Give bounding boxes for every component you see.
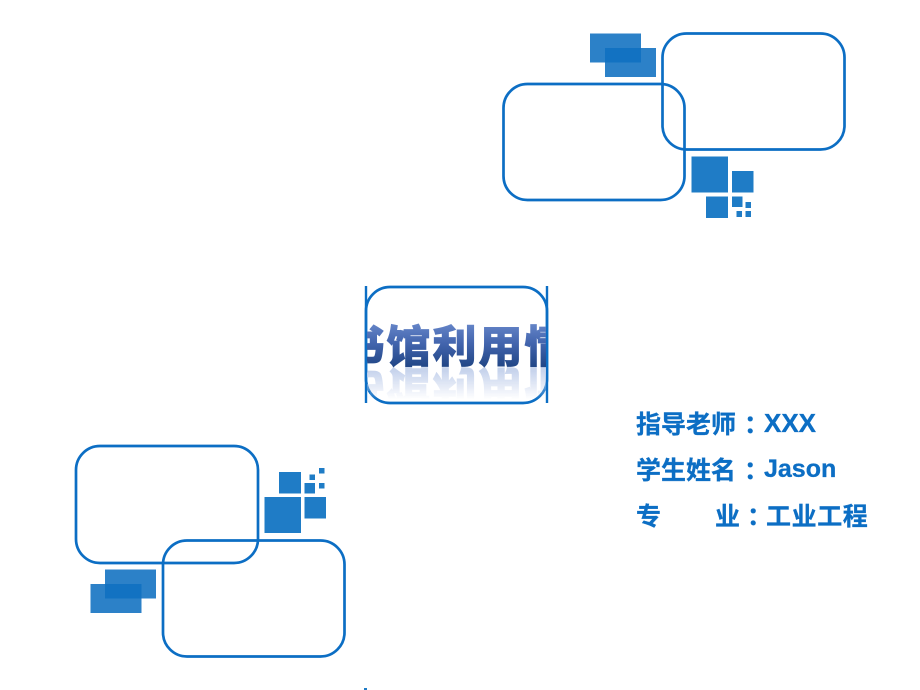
- info: major: 专: [636, 497, 661, 533]
- top-right square cluster: [692, 156, 754, 218]
- info: major: 工业工程: [766, 497, 868, 533]
- bottom-left square cluster: [264, 468, 326, 533]
- info: student name: [636, 451, 836, 487]
- info: student name: 学生姓名: [636, 451, 736, 487]
- info: advisor: 指导老师: [636, 405, 736, 441]
- info: advisor: ：: [744, 405, 769, 441]
- bottom-left overlapping rectangles: [90, 570, 156, 613]
- info: major: [636, 497, 868, 533]
- top-right overlapping rectangles: [590, 34, 656, 77]
- bottom-left rounded frames: [76, 446, 344, 656]
- bottom edge mark: [364, 688, 367, 690]
- top-right rounded frames: [504, 34, 844, 200]
- info: major: 业: [715, 497, 740, 533]
- center title frame: [366, 286, 547, 403]
- info: student name: Jason: [764, 455, 836, 483]
- info: student name: ：: [744, 451, 769, 487]
- info: major: ：: [747, 497, 772, 533]
- info: advisor: XXX: [764, 408, 816, 438]
- info: advisor: [636, 405, 816, 441]
